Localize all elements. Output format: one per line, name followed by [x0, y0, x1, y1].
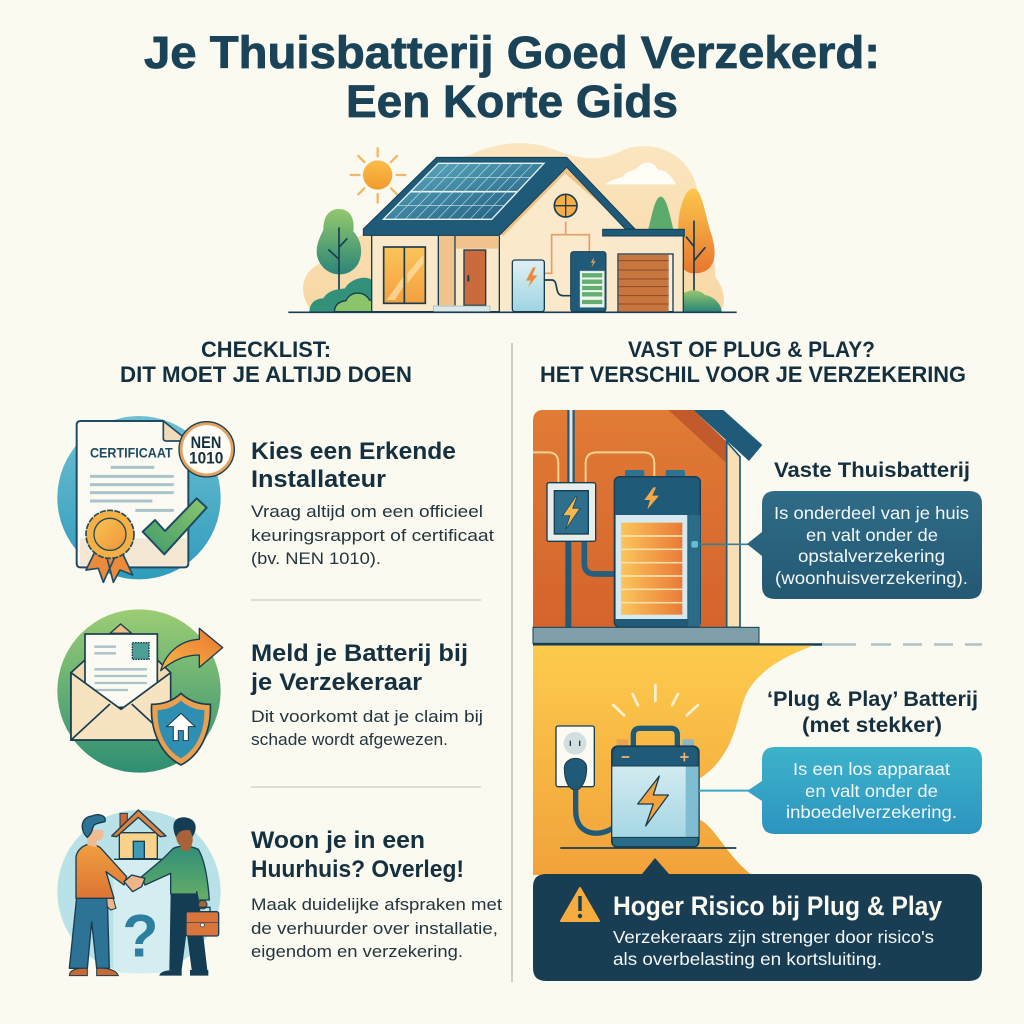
- text block: melden bij verzekeraar: [250, 640, 483, 749]
- warning box: Verzekeraars zijn strenger door risico's: [613, 927, 934, 947]
- text block: huurhuis: de verhuurder over installatie,: [251, 919, 498, 938]
- roof edge: [693, 410, 762, 461]
- callout: vaste thuisbatterij: opstalverzekering: [798, 546, 945, 566]
- illustration: house with solar panels and battery: [288, 143, 737, 312]
- text block: erkende installateur: keuringsrapport of certificaat: [251, 526, 494, 545]
- heading: checklist: DIT MOET JE ALTIJD DOEN: [120, 362, 412, 387]
- garage: [603, 229, 684, 312]
- handshake: [124, 875, 145, 892]
- yellow background shape: [533, 646, 813, 875]
- home battery unit: [571, 252, 606, 312]
- heading: plug and play batterij: [767, 688, 978, 737]
- heading: plug and play batterij: (met stekker): [802, 714, 942, 737]
- icon: cloud: [605, 163, 677, 184]
- ground shadow line: [560, 845, 736, 850]
- text block: huurhuis: Maak duidelijke afspraken met: [251, 895, 502, 914]
- briefcase: [186, 907, 219, 936]
- text block: melden bij verzekeraar: schade wordt afgewezen.: [251, 730, 448, 749]
- ground line: [288, 310, 737, 315]
- person left: [69, 815, 127, 976]
- fuse box: [547, 483, 596, 541]
- icon: trees and bushes: [309, 188, 722, 312]
- heading: plug and play batterij: ‘Plug & Play’ Batterij: [767, 688, 978, 711]
- solar panel: [383, 163, 544, 219]
- sparks: [613, 685, 698, 715]
- floor slab: [533, 627, 759, 643]
- panel: plug and play battery: [533, 646, 813, 875]
- title: Een Korte Gids: [346, 76, 678, 127]
- round attic window: [554, 194, 577, 217]
- panel: fixed battery: [533, 410, 762, 643]
- NEN 1010 badge: 1010: [189, 449, 223, 468]
- heading: vaste thuisbatterij: Vaste Thuisbatterij: [774, 459, 970, 482]
- icon: envelope and shield: [57, 609, 223, 773]
- icon: certificate: [57, 416, 234, 582]
- orange house wall: [533, 410, 727, 627]
- heading: checklist: [120, 337, 412, 387]
- text block: erkende installateur: (bv. NEN 1010).: [251, 549, 381, 568]
- warning box: [533, 858, 982, 981]
- green check mark: [143, 498, 207, 554]
- text block: erkende installateur: Installateur: [251, 466, 386, 493]
- warning box: Hoger Risico bij Plug & Play: [613, 891, 942, 921]
- warning box: als overbelasting en kortsluiting.: [613, 949, 882, 969]
- callout: vaste thuisbatterij: [747, 491, 982, 599]
- text block: huurhuis: [251, 827, 502, 961]
- document: [77, 421, 188, 567]
- cream side beam: [727, 442, 740, 627]
- person right: [142, 817, 219, 976]
- large battery: [614, 470, 700, 627]
- seal with ribbon: [86, 510, 134, 582]
- plug cable: [576, 790, 612, 833]
- pipes: [533, 452, 654, 483]
- house body: [372, 167, 683, 312]
- heading: fixed or plug and play: VAST OF PLUG & PLAY?: [628, 337, 875, 362]
- text block: erkende installateur: Kies een Erkende: [251, 438, 456, 465]
- title: [144, 27, 880, 127]
- callout: plug and play: inboedelverzekering.: [786, 802, 957, 822]
- icon: sun: [351, 148, 405, 203]
- icon: tenant and landlord handshake: [57, 810, 221, 976]
- shield with house: [151, 693, 210, 765]
- NEN 1010 badge: NEN: [191, 433, 221, 452]
- text block: erkende installateur: Vraag altijd om een officieel: [251, 502, 483, 521]
- callout: plug and play: Is een los apparaat: [793, 759, 950, 779]
- title: Je Thuisbatterij Goed Verzekerd:: [144, 27, 880, 78]
- callout: plug and play: en valt onder de: [805, 781, 938, 801]
- small house: [112, 810, 166, 859]
- callout: plug and play: [747, 747, 982, 834]
- battery cable: [544, 280, 572, 296]
- text block: melden bij verzekeraar: Meld je Batterij bij: [251, 640, 468, 667]
- porch and door: [434, 236, 499, 312]
- front window: [384, 247, 425, 303]
- callout: vaste thuisbatterij: Is onderdeel van je huis: [774, 503, 969, 523]
- envelope with letter: [71, 624, 171, 740]
- text block: huurhuis: Huurhuis? Overleg!: [251, 856, 464, 883]
- callout: vaste thuisbatterij: (woonhuisverzekering).: [775, 568, 968, 588]
- wall socket: [556, 726, 594, 790]
- heading: fixed or plug and play: HET VERSCHIL VOOR JE VERZEKERING: [540, 362, 966, 387]
- portable battery: [612, 728, 699, 847]
- text block: melden bij verzekeraar: je Verzekeraar: [250, 669, 422, 696]
- text block: huurhuis: eigendom en verzekering.: [251, 942, 463, 961]
- text block: erkende installateur: [251, 438, 494, 568]
- text block: melden bij verzekeraar: Dit voorkomt dat je claim bij: [251, 707, 483, 726]
- dividing line: [533, 643, 822, 646]
- question mark: ?: [122, 903, 158, 970]
- connector line: [700, 542, 752, 547]
- arrow: [161, 628, 223, 671]
- text block: huurhuis: Woon je in een: [251, 827, 425, 854]
- callout: vaste thuisbatterij: en valt onder de: [806, 525, 938, 545]
- wiring: [545, 222, 589, 273]
- roof: [363, 157, 635, 235]
- document: CERTIFICAAT: [90, 445, 173, 460]
- connector line: [699, 788, 752, 794]
- heading: fixed or plug and play: [540, 337, 966, 387]
- inverter: [512, 260, 544, 312]
- heading: checklist: CHECKLIST:: [201, 337, 331, 362]
- icon: warning triangle: [561, 888, 599, 921]
- NEN 1010 badge: [179, 422, 234, 477]
